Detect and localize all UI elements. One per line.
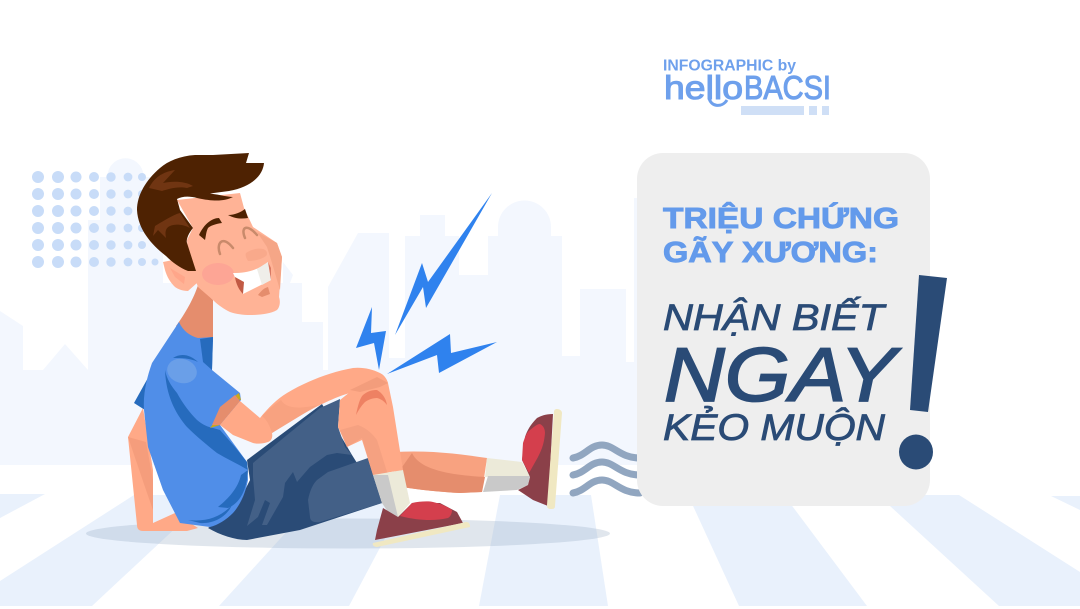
headline: NGAY <box>664 333 902 418</box>
neck <box>176 285 213 346</box>
shoe, extended leg <box>518 409 562 509</box>
exclamation mark <box>899 275 947 470</box>
stethoscope loop <box>709 98 727 105</box>
rear arm <box>128 408 198 531</box>
extended leg <box>395 451 487 493</box>
subtitle: GÃY XƯƠNG: <box>663 235 878 269</box>
subtitle: TRIỆU CHỨNG <box>663 201 899 235</box>
crosswalk stripes <box>0 494 1080 606</box>
eyebrows <box>199 209 248 240</box>
headline: NHẬN BIẾT <box>663 296 887 338</box>
lightning bolts <box>356 193 497 374</box>
logo wordmark <box>664 69 831 106</box>
ground shadow <box>86 518 610 548</box>
bent leg <box>338 383 403 475</box>
shorts <box>208 399 382 540</box>
front arm <box>212 368 388 444</box>
blush <box>202 263 234 285</box>
headline <box>663 296 902 448</box>
logo bars <box>741 106 829 115</box>
head <box>137 153 282 315</box>
nose <box>246 249 267 261</box>
logo <box>663 58 831 115</box>
sleeve cuff <box>210 393 241 428</box>
character: injured man <box>128 153 562 547</box>
closed eyes <box>219 228 257 254</box>
shoe, bent leg <box>373 501 470 547</box>
logo wordmark: BACSI <box>744 69 831 106</box>
logo wordmark: hello <box>664 69 743 106</box>
sock, bent leg <box>373 470 410 517</box>
title text <box>663 201 902 448</box>
face shading <box>257 232 282 290</box>
sock, extended leg <box>483 458 530 492</box>
t-shirt <box>134 322 248 527</box>
mouth <box>233 262 271 297</box>
ear <box>163 258 197 291</box>
hair <box>137 153 264 271</box>
vibration waves <box>573 445 640 493</box>
headline: KẺO MUỘN <box>663 406 885 448</box>
face <box>177 193 282 315</box>
city skyline background <box>0 158 640 465</box>
halftone dots <box>32 171 158 268</box>
title panel <box>637 153 930 506</box>
logo caption: INFOGRAPHIC by <box>663 58 796 74</box>
subtitle <box>663 201 899 269</box>
